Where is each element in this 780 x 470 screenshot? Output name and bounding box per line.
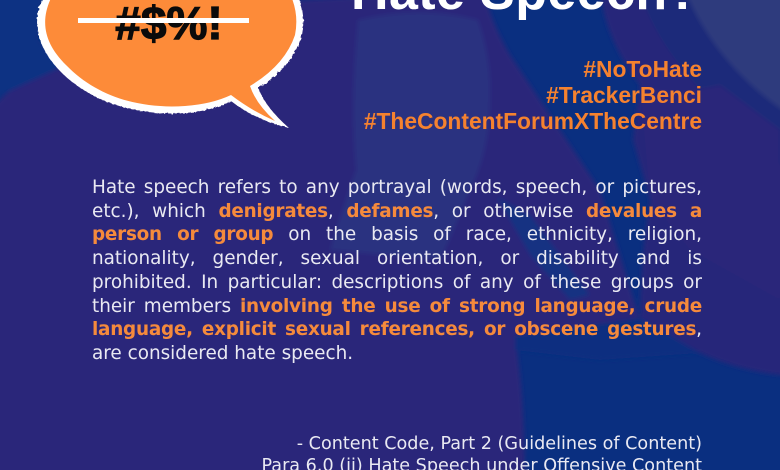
body paragraph: their members involving the use of strong language, crude: [92, 296, 702, 317]
hashtags: [364, 56, 702, 134]
bubble shape: [37, 0, 303, 128]
body paragraph: nationality, gender, sexual orientation, or disability and is: [92, 248, 702, 269]
body paragraph: language, explicit sexual references, or obscene gestures,: [92, 319, 702, 340]
body paragraph: etc.), which denigrates, defames, or otherwise devalues a: [92, 201, 702, 222]
hashtags: #NoToHate: [583, 56, 702, 82]
citation: [261, 434, 702, 470]
body paragraph: [92, 177, 702, 364]
body paragraph: person or group on the basis of race, ethnicity, religion,: [92, 224, 702, 245]
body paragraph: prohibited. In particular: descriptions of any of these groups or: [92, 272, 702, 293]
hashtags: #TrackerBenci: [546, 82, 702, 108]
strikethrough bar: [78, 18, 249, 23]
body paragraph: are considered hate speech.: [92, 343, 353, 364]
hashtags: #TheContentForumXTheCentre: [364, 108, 702, 134]
citation: - Content Code, Part 2 (Guidelines of Content): [297, 434, 702, 454]
body paragraph: Hate speech refers to any portrayal (words, speech, or pictures,: [92, 177, 702, 198]
speech bubble with censored symbols: [36, 0, 304, 128]
